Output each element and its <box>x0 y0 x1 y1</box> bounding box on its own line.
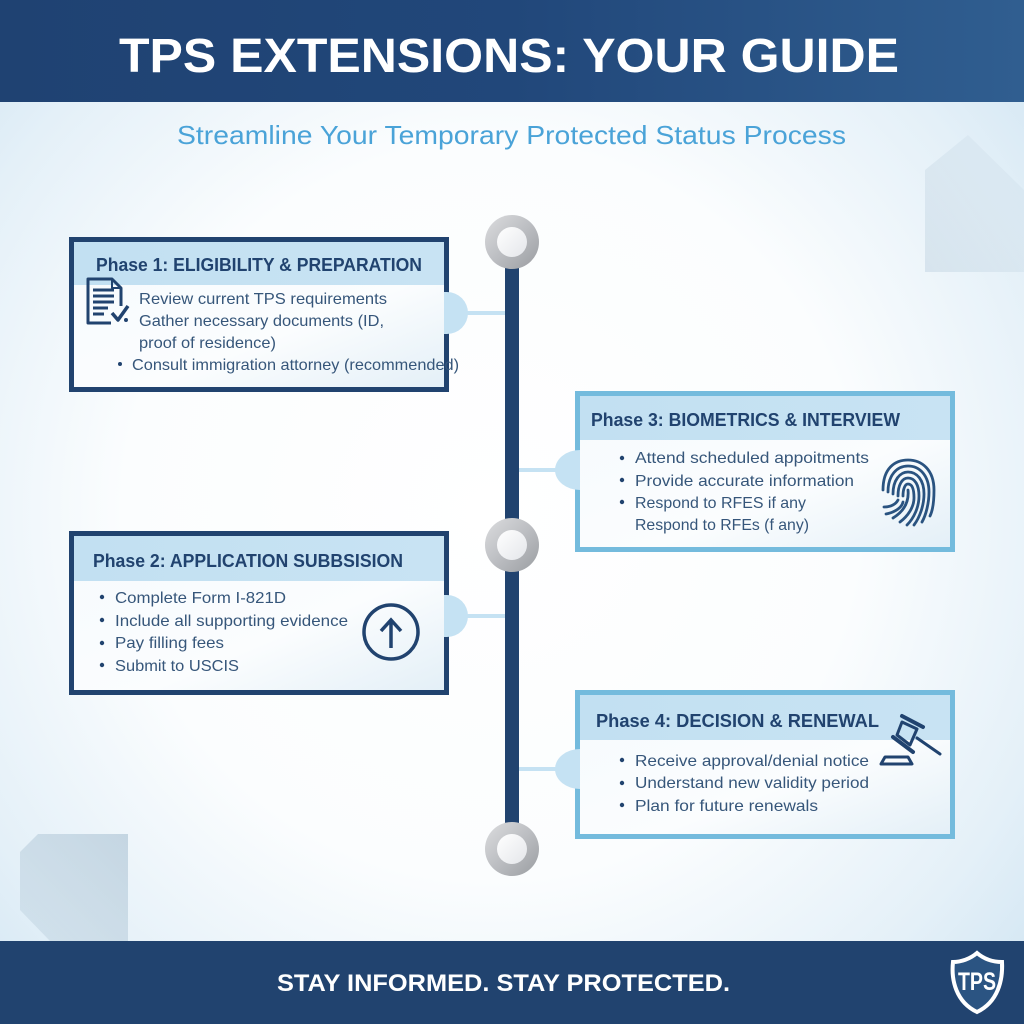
bullet list: phase 4: Understand new validity period <box>635 775 869 792</box>
icon: TPS shield <box>953 953 1002 1012</box>
bullet list: phase 1: Gather necessary documents (ID, <box>139 313 384 330</box>
bullet list: phase 1: proof of residence) <box>139 335 276 352</box>
timeline spine <box>505 250 519 840</box>
icon: upload arrow <box>364 605 418 659</box>
heading: phase 1: Phase 1: ELIGIBILITY & PREPARATION <box>96 255 422 275</box>
bullet list: phase 3: Respond to RFES if any <box>635 495 806 512</box>
panel: phase 3 <box>519 394 952 550</box>
footer band <box>0 941 1024 1024</box>
decorative shape: top right <box>925 135 1024 272</box>
bullet list: phase 2: Include all supporting evidence <box>115 613 348 630</box>
panel: phase 2 <box>72 534 505 692</box>
icon: gavel <box>881 716 940 764</box>
bullet list: phase 3: Attend scheduled appoitments <box>635 450 869 467</box>
icon: document with check <box>88 279 128 323</box>
bullet list: phase 3 <box>620 450 869 534</box>
panel: phase 1 <box>72 240 505 390</box>
bullet list: phase 2 <box>100 590 348 675</box>
bullet list: phase 3: Provide accurate information <box>635 473 854 490</box>
title: TPS EXTENSIONS: YOUR GUIDE <box>119 30 899 83</box>
heading: phase 3: Phase 3: BIOMETRICS & INTERVIEW <box>591 410 900 430</box>
connector: phase 3 <box>519 450 580 490</box>
bullet list: phase 2: Pay filling fees <box>115 635 224 652</box>
connector: phase 4 <box>519 749 580 789</box>
timeline node 2 <box>485 518 539 572</box>
bullet list: phase 1 <box>118 291 459 374</box>
heading: phase 4: Phase 4: DECISION & RENEWAL <box>596 711 879 731</box>
panel: phase 4 <box>519 692 952 836</box>
bullet list: phase 1: Review current TPS requirements <box>139 291 387 308</box>
header band <box>0 0 1024 102</box>
subtitle: Streamline Your Temporary Protected Status Process <box>177 120 846 150</box>
timeline node 1 <box>485 215 539 269</box>
bullet list: phase 4: Receive approval/denial notice <box>635 753 869 770</box>
bullet list: phase 3: Respond to RFEs (f any) <box>635 517 809 534</box>
connector: phase 1 <box>444 292 505 334</box>
icon: fingerprint <box>883 460 934 525</box>
footer text: STAY INFORMED. STAY PROTECTED. <box>277 970 730 997</box>
icon: TPS shield: TPS <box>958 968 996 996</box>
heading: phase 2: Phase 2: APPLICATION SUBBSISION <box>93 551 403 571</box>
connector: phase 2 <box>444 595 505 637</box>
bullet list: phase 2: Complete Form I-821D <box>115 590 286 607</box>
bullet list: phase 2: Submit to USCIS <box>115 658 239 675</box>
timeline node 3 <box>485 822 539 876</box>
decorative shape: bottom left <box>20 834 128 941</box>
bullet list: phase 1: Consult immigration attorney (recommended) <box>132 357 459 374</box>
bullet list: phase 4: Plan for future renewals <box>635 798 818 815</box>
bullet list: phase 4 <box>620 753 869 815</box>
